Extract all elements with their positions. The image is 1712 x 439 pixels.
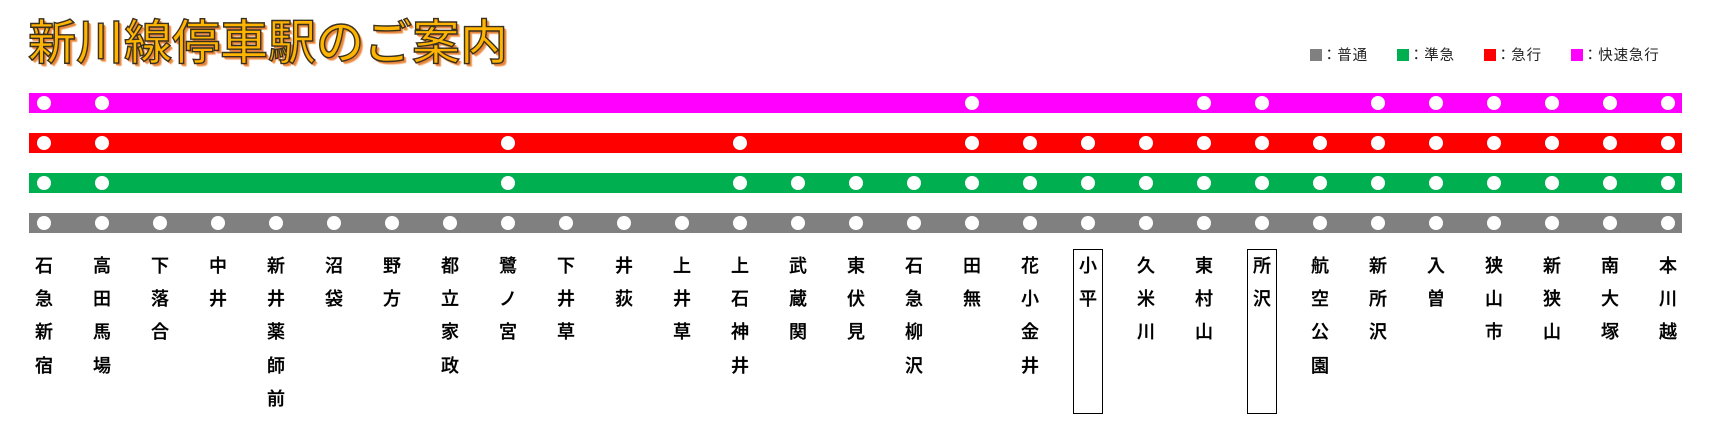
station: 久米川: 久 xyxy=(1137,256,1155,276)
legend: 普通: ：普通 xyxy=(1322,48,1368,64)
station: 下井草: 井 xyxy=(557,289,575,309)
station: 新井薬師前: 前 xyxy=(267,389,285,409)
station: 鷺ノ宮: ノ xyxy=(499,289,517,309)
station: 南大塚 xyxy=(1601,256,1619,342)
station: 中井: 井 xyxy=(209,289,227,309)
station: 新狭山: 狭 xyxy=(1543,289,1561,309)
station: 沼袋 xyxy=(325,256,343,309)
station: 航空公園: 空 xyxy=(1311,289,1329,309)
station: 沼袋: 袋 xyxy=(325,289,343,309)
station: 久米川: 川 xyxy=(1137,322,1155,342)
station: 本川越: 川 xyxy=(1659,289,1677,309)
title: 新川線停車駅のご案内 xyxy=(28,17,508,70)
station: 上石神井: 上 xyxy=(731,256,749,276)
station: 下落合: 落 xyxy=(151,289,169,309)
station: 野方: 方 xyxy=(383,289,401,309)
station: 都立家政: 家 xyxy=(441,322,459,342)
station: 石急柳沢 xyxy=(905,256,923,376)
station: 本川越: 越 xyxy=(1659,322,1677,342)
station: 航空公園: 航 xyxy=(1311,256,1329,276)
station: 鷺ノ宮: 宮 xyxy=(499,322,517,342)
line: 急行 xyxy=(29,133,1682,153)
station: 中井 xyxy=(209,256,227,309)
station: 高田馬場 xyxy=(93,256,111,376)
station: 下井草: 下 xyxy=(557,256,575,276)
station: 東伏見: 伏 xyxy=(847,289,865,309)
station: 東伏見: 見 xyxy=(847,322,865,342)
station: 井荻: 荻 xyxy=(615,289,633,309)
station: 下井草: 草 xyxy=(557,322,575,342)
station: 南大塚: 南 xyxy=(1601,256,1619,276)
legend: 快速急行: ：快速急行 xyxy=(1583,48,1660,64)
station: 東村山 xyxy=(1195,256,1213,342)
station: 石急新宿: 急 xyxy=(35,289,53,309)
station: 武蔵関 xyxy=(789,256,807,342)
station: 沼袋: 沼 xyxy=(325,256,343,276)
station: 上石神井 xyxy=(731,256,749,376)
station: 高田馬場: 田 xyxy=(93,289,111,309)
station: 都立家政: 都 xyxy=(441,256,459,276)
legend: 急行: ：急行 xyxy=(1496,48,1542,64)
station: 小平 (boxed): 平 xyxy=(1079,289,1097,309)
station: 新所沢 xyxy=(1369,256,1387,342)
station: 新所沢: 沢 xyxy=(1369,322,1387,342)
station: 花小金井: 花 xyxy=(1021,256,1039,276)
station: 石急柳沢: 急 xyxy=(905,289,923,309)
station: 本川越 xyxy=(1659,256,1677,342)
station: 下落合: 下 xyxy=(151,256,169,276)
line: 準急 xyxy=(29,173,1682,193)
station: 武蔵関: 武 xyxy=(789,256,807,276)
station: 航空公園: 園 xyxy=(1311,356,1329,376)
station: 新井薬師前: 師 xyxy=(267,356,285,376)
station: 下落合: 合 xyxy=(151,322,169,342)
station: 石急柳沢: 柳 xyxy=(905,322,923,342)
station: 武蔵関: 関 xyxy=(789,322,807,342)
station: 都立家政: 政 xyxy=(441,356,459,376)
station: 東村山: 東 xyxy=(1195,256,1213,276)
station: 所沢 (boxed): 沢 xyxy=(1253,289,1271,309)
station: 武蔵関: 蔵 xyxy=(789,289,807,309)
station: 狭山市: 山 xyxy=(1485,289,1503,309)
station: 新井薬師前: 新 xyxy=(267,256,285,276)
station: 小平 (boxed): 小 xyxy=(1079,256,1097,276)
station: 南大塚: 塚 xyxy=(1601,322,1619,342)
station: 都立家政: 立 xyxy=(441,289,459,309)
station: 新所沢: 新 xyxy=(1369,256,1387,276)
station: 上井草: 井 xyxy=(673,289,691,309)
station: 小平 (boxed) xyxy=(1073,249,1103,414)
station: 石急新宿 xyxy=(35,256,53,376)
station: 久米川: 米 xyxy=(1137,289,1155,309)
station: 新狭山 xyxy=(1543,256,1561,342)
station: 東村山: 山 xyxy=(1195,322,1213,342)
station: 東村山: 村 xyxy=(1195,289,1213,309)
station: 石急柳沢: 石 xyxy=(905,256,923,276)
station: 高田馬場: 高 xyxy=(93,256,111,276)
station: 中井: 中 xyxy=(209,256,227,276)
station: 石急新宿: 宿 xyxy=(35,356,53,376)
station: 上井草 xyxy=(673,256,691,342)
station: 鷺ノ宮 xyxy=(499,256,517,342)
station: 花小金井: 井 xyxy=(1021,356,1039,376)
station: 東伏見 xyxy=(847,256,865,342)
station: 新井薬師前 xyxy=(267,256,285,409)
station: 下落合 xyxy=(151,256,169,342)
station: 南大塚: 大 xyxy=(1601,289,1619,309)
station: 新狭山: 新 xyxy=(1543,256,1561,276)
station: 井荻 xyxy=(615,256,633,309)
station: 上井草: 草 xyxy=(673,322,691,342)
station: 井荻: 井 xyxy=(615,256,633,276)
station: 石急柳沢: 沢 xyxy=(905,356,923,376)
station: 石急新宿: 新 xyxy=(35,322,53,342)
station: 上井草: 上 xyxy=(673,256,691,276)
station: 花小金井: 金 xyxy=(1021,322,1039,342)
station: 上石神井: 井 xyxy=(731,356,749,376)
station: 下井草 xyxy=(557,256,575,342)
station: 田無: 無 xyxy=(963,289,981,309)
station: 航空公園 xyxy=(1311,256,1329,376)
legend: 準急: ：準急 xyxy=(1409,48,1455,64)
station: 新所沢: 所 xyxy=(1369,289,1387,309)
station: 石急新宿: 石 xyxy=(35,256,53,276)
station: 所沢 (boxed) xyxy=(1247,249,1277,414)
station: 東伏見: 東 xyxy=(847,256,865,276)
station: 本川越: 本 xyxy=(1659,256,1677,276)
station: 新井薬師前: 井 xyxy=(267,289,285,309)
station: 新狭山: 山 xyxy=(1543,322,1561,342)
station: 新井薬師前: 薬 xyxy=(267,322,285,342)
line: 普通 xyxy=(29,213,1682,233)
station: 入曽: 入 xyxy=(1427,256,1445,276)
station: 久米川 xyxy=(1137,256,1155,342)
station: 入曽 xyxy=(1427,256,1445,309)
station: 花小金井 xyxy=(1021,256,1039,376)
station: 高田馬場: 馬 xyxy=(93,322,111,342)
station: 所沢 (boxed): 所 xyxy=(1253,256,1271,276)
station: 都立家政 xyxy=(441,256,459,376)
station: 航空公園: 公 xyxy=(1311,322,1329,342)
station: 野方: 野 xyxy=(383,256,401,276)
station: 上石神井: 神 xyxy=(731,322,749,342)
station: 入曽: 曽 xyxy=(1427,289,1445,309)
station: 野方 xyxy=(383,256,401,309)
station: 花小金井: 小 xyxy=(1021,289,1039,309)
station: 上石神井: 石 xyxy=(731,289,749,309)
station: 田無 xyxy=(963,256,981,309)
station: 狭山市: 市 xyxy=(1485,322,1503,342)
station: 狭山市 xyxy=(1485,256,1503,342)
station: 狭山市: 狭 xyxy=(1485,256,1503,276)
station: 田無: 田 xyxy=(963,256,981,276)
station: 高田馬場: 場 xyxy=(93,356,111,376)
station: 鷺ノ宮: 鷺 xyxy=(499,256,517,276)
line: 快速急行 xyxy=(29,93,1682,113)
